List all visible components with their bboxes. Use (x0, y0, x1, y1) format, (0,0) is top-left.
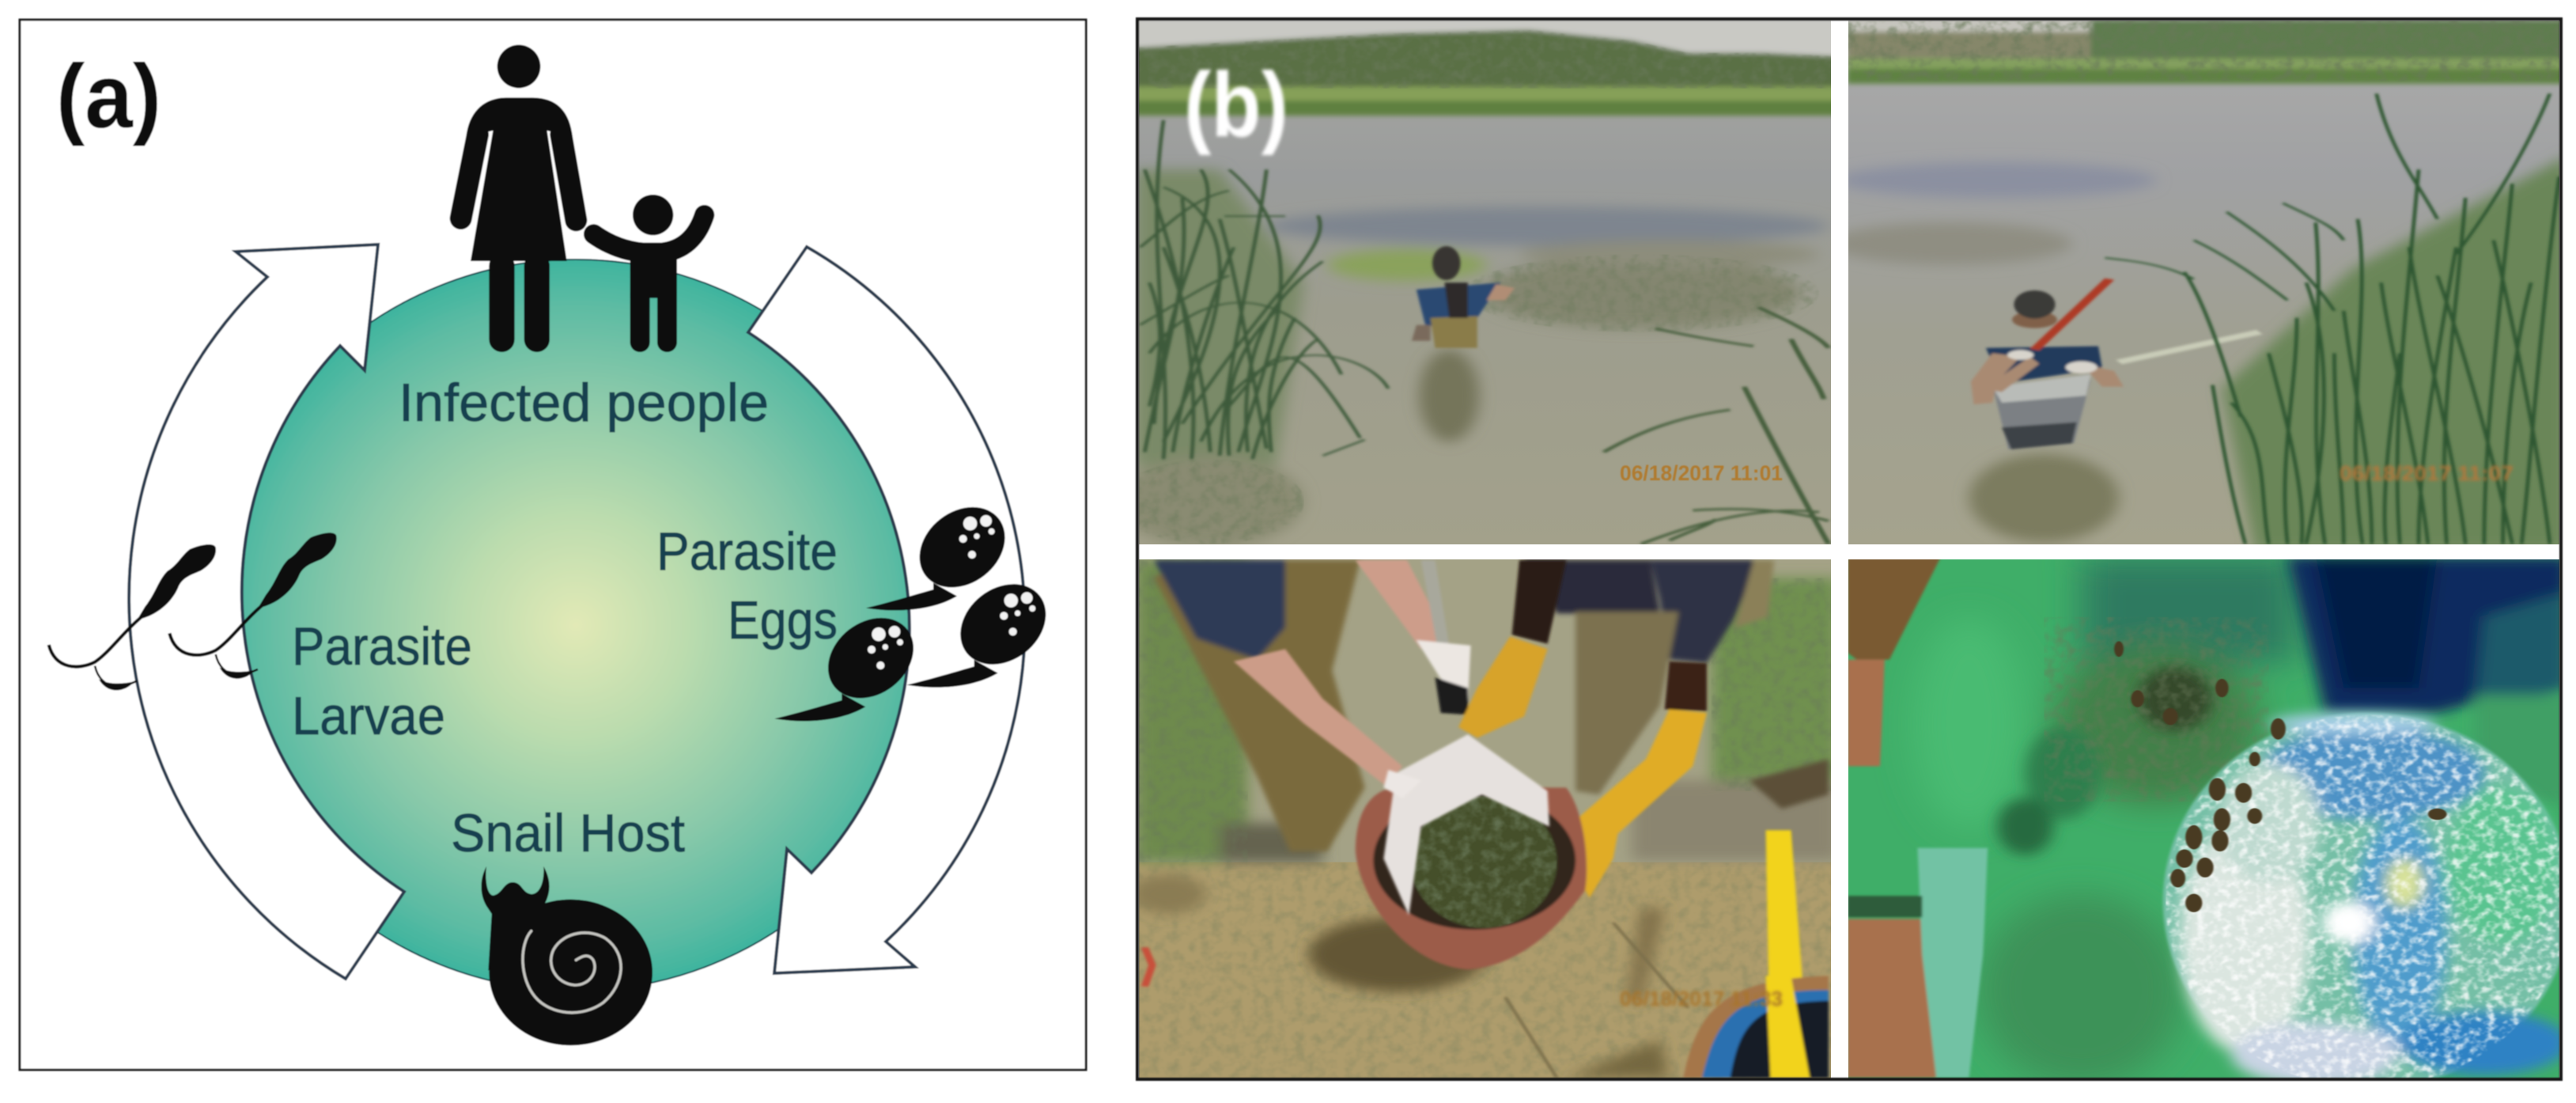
label: parasite larvae: Larvae (292, 686, 445, 746)
icon: parasite larvae (49, 533, 337, 690)
panel: (a) life cycle diagram (20, 20, 1086, 1070)
panel frame (1137, 19, 2561, 1079)
arrow: larvae to people (129, 244, 404, 979)
arrow: people to snail (748, 247, 1025, 973)
photo: snails in green tub (1848, 556, 2571, 1090)
icon: woman and child (461, 45, 705, 352)
icon: parasite eggs (774, 491, 1061, 721)
icon: snail host (481, 866, 653, 1045)
label: parasite eggs: Parasite (656, 521, 838, 582)
photo: wading in pond (1117, 17, 1838, 548)
disc: life cycle circle (210, 260, 941, 991)
label: parasite eggs: Eggs (728, 590, 838, 650)
timestamp: 06/18/2017 11:33 (1620, 987, 1783, 1010)
label: snail host: Snail Host (451, 803, 685, 863)
label: infected people: Infected people (399, 373, 769, 433)
label: parasite larvae: Parasite (292, 616, 472, 677)
photo: sampling with net (1829, 17, 2569, 551)
heading: (b): (b) (1184, 53, 1288, 156)
timestamp: 06/18/2017 11:07 (2340, 461, 2514, 485)
panel: (b) field photographs (1117, 17, 2571, 1090)
timestamp: 06/18/2017 11:01 (1620, 461, 1783, 485)
photo: washing sample in pot (1131, 556, 1838, 1082)
heading: (a): (a) (56, 47, 161, 147)
